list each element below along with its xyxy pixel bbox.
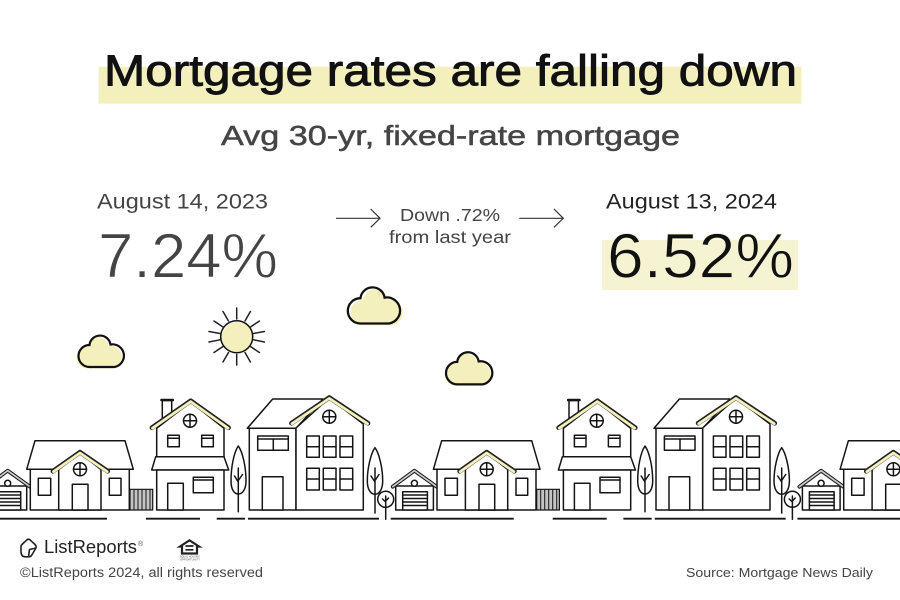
source: Source: Mortgage News Daily	[686, 565, 874, 580]
icon: cloud right	[444, 352, 492, 386]
rate: 2024: 6.52%	[607, 222, 794, 292]
arrow: right	[519, 209, 563, 227]
ListReports wordmark: ListReports	[44, 537, 137, 557]
icon: equal housing: OPPORTUNITY	[180, 557, 200, 561]
icon: cloud left	[76, 336, 124, 368]
neighborhood row 2	[391, 398, 800, 519]
icon: ListReports logo	[21, 539, 36, 557]
registered mark: ®	[138, 540, 144, 548]
date: 2023: August 14, 2023	[97, 190, 268, 214]
change label: from last year	[389, 227, 511, 247]
title: Mortgage rates are falling down	[104, 46, 797, 96]
rate: 2023: 7.24%	[98, 222, 278, 292]
copyright: ©ListReports 2024, all rights reserved	[20, 565, 263, 580]
change label	[389, 205, 511, 247]
icon: equal housing: EQUAL HOUSING	[180, 554, 200, 558]
title highlight	[98, 67, 802, 104]
neighborhood row 3	[797, 398, 900, 519]
arrow: left	[336, 209, 380, 227]
neighborhood row 1	[0, 398, 394, 519]
rate highlight	[602, 240, 798, 290]
subtitle: Avg 30-yr, fixed-rate mortgage	[221, 120, 680, 151]
date: 2024: August 13, 2024	[606, 190, 777, 214]
icon: cloud center	[348, 287, 403, 325]
icon: equal housing	[180, 540, 200, 561]
change label: Down .72%	[400, 205, 500, 225]
icon: sun	[209, 308, 264, 365]
